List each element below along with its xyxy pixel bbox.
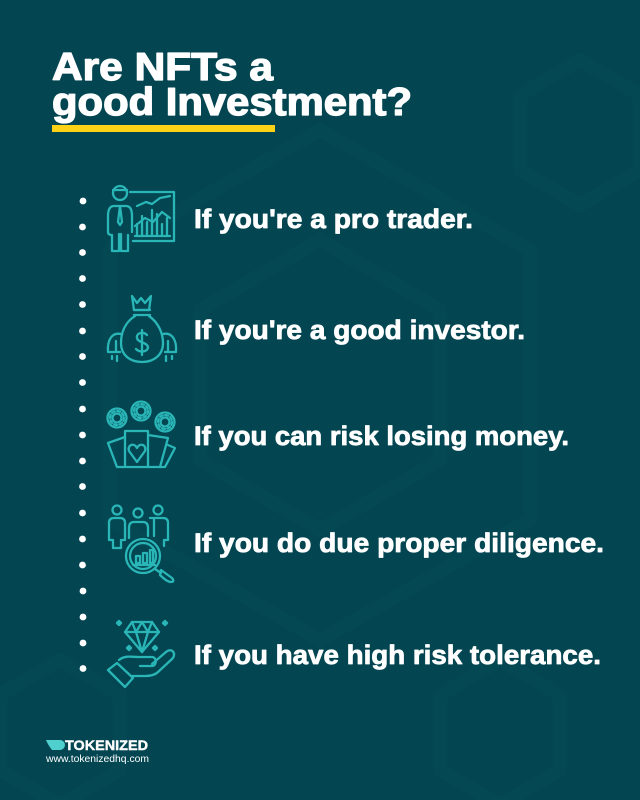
text: due diligence: If you do due proper diligence. (194, 528, 604, 558)
text: high risk tolerance: If you have high risk tolerance. (194, 640, 601, 670)
website url: www.tokenizedhq.com (45, 753, 149, 765)
icon: money bag with wings (108, 296, 176, 362)
title: good Investment? (52, 81, 412, 124)
text: risk losing money: If you can risk losing money. (194, 421, 569, 451)
icon: diamond in open hand (108, 621, 174, 687)
logo wordmark: TOKENIZED (65, 737, 148, 753)
title underline (52, 125, 275, 132)
text: good investor: If you're a good investor. (194, 315, 525, 345)
icon: poker chips and cards (108, 402, 175, 467)
logo: Tokenized (46, 737, 148, 753)
logo mark (46, 740, 65, 750)
title (52, 46, 412, 124)
title: Are NFTs a (52, 46, 273, 89)
text: pro trader: If you're a pro trader. (194, 204, 473, 234)
dotted timeline (79, 198, 86, 672)
icon: trader with chart board (108, 186, 174, 251)
icon: team with magnifying glass (109, 506, 173, 582)
